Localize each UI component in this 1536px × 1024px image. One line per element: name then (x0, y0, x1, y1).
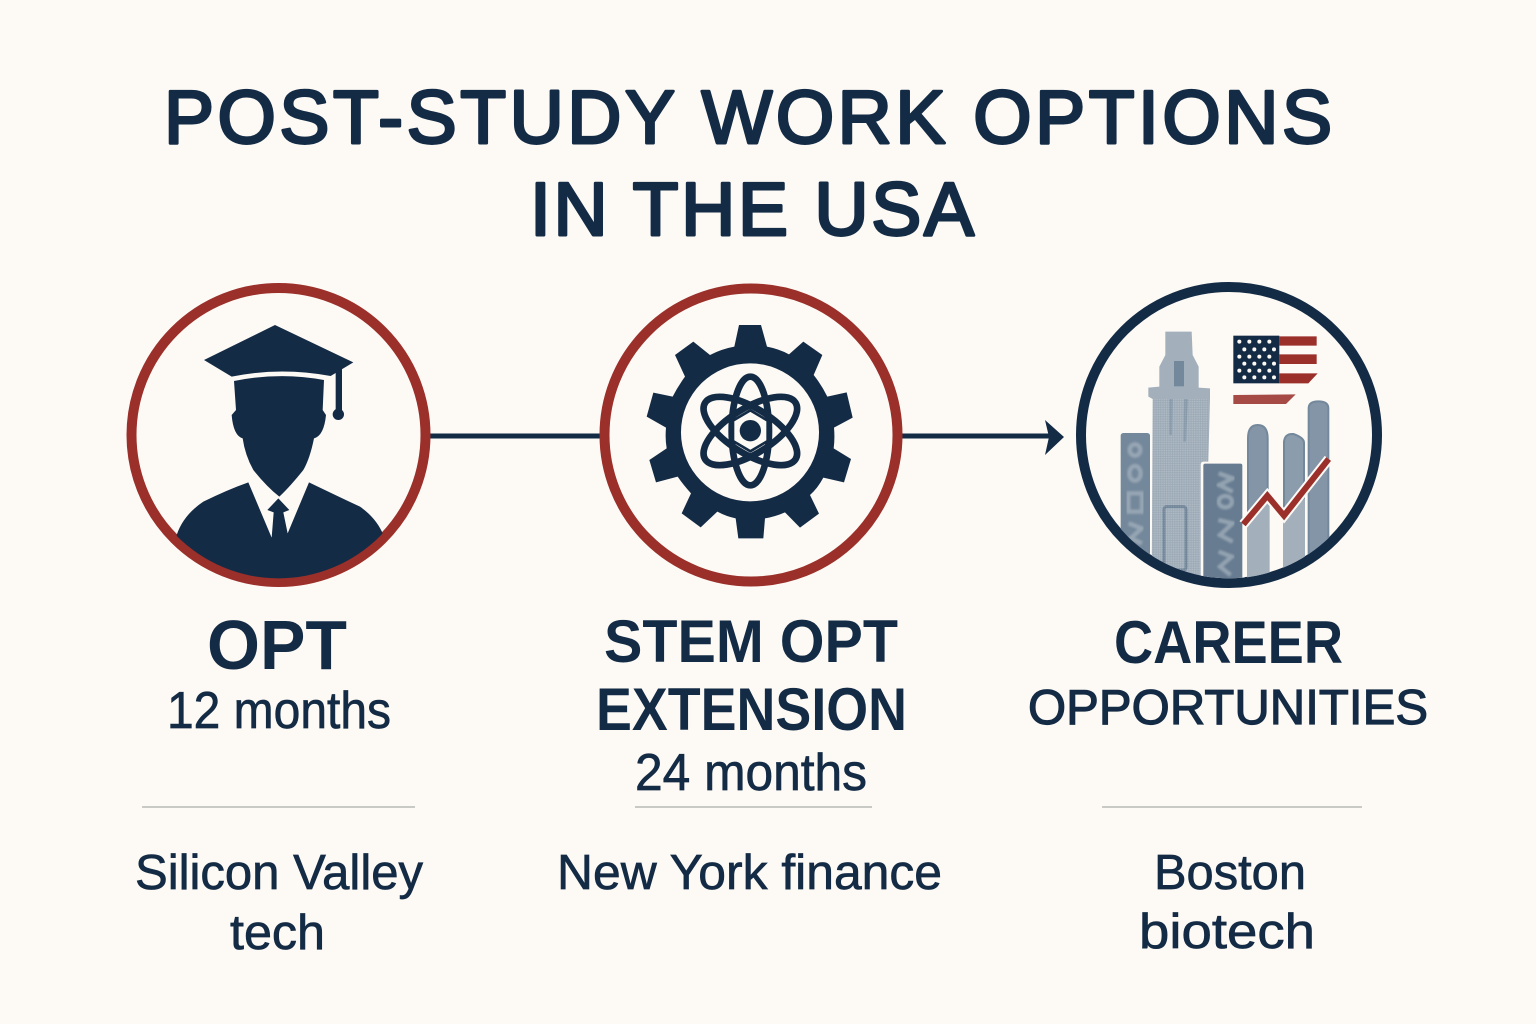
building: right block (1203, 464, 1242, 587)
title (164, 75, 1332, 251)
text block: Boston biotech: Boston (1154, 846, 1306, 900)
building: tall pillar one (1248, 425, 1268, 585)
arrow: STEM OPT to career opportunities (900, 420, 1064, 455)
text block: career opportunities: CAREER (1114, 609, 1343, 676)
title: IN THE USA (530, 167, 974, 251)
text block: Silicon Valley tech: tech (230, 906, 325, 960)
building: left block (1120, 433, 1150, 554)
text block: Boston biotech (1139, 846, 1315, 959)
connector: OPT to STEM OPT (428, 434, 602, 438)
building: lower pillar highlights (1247, 504, 1270, 578)
text block: OPT (167, 606, 391, 740)
text block: STEM OPT extension: EXTENSION (596, 676, 907, 743)
text block: Boston biotech: biotech (1139, 905, 1315, 959)
text block: STEM OPT extension (596, 608, 907, 802)
infographic: post-study work options (126, 88, 1426, 950)
icon: American flag (1233, 336, 1318, 404)
icon: graduate silhouette with cap (177, 325, 383, 592)
icon: red growth line (1243, 459, 1329, 524)
building: right block outline (1201, 462, 1245, 588)
text block: OPT: 12 months (167, 682, 391, 740)
title: POST-STUDY WORK OPTIONS (164, 75, 1332, 159)
text block: STEM OPT extension: 24 months (635, 744, 867, 802)
text block: New York finance: New York finance (557, 846, 942, 900)
text block: STEM OPT extension: STEM OPT (604, 608, 898, 675)
icon: city skyline with flag and growth line (1121, 332, 1329, 588)
building: tall pillar three (1309, 401, 1328, 585)
text block: career opportunities: OPPORTUNITIES (1028, 681, 1428, 735)
text block: OPT: OPT (207, 606, 347, 684)
panel: career opportunities icon circle (1081, 287, 1377, 588)
icon: gear with atom (647, 325, 853, 538)
text block: career opportunities (1028, 609, 1428, 735)
text block: Silicon Valley tech: Silicon Valley (135, 846, 423, 900)
text block: Silicon Valley tech (135, 846, 423, 960)
panel: STEM OPT icon circle (604, 288, 898, 582)
building: tall pillar two (1284, 434, 1304, 585)
panel: OPT icon circle (132, 288, 426, 592)
building: central tower (1148, 332, 1210, 586)
